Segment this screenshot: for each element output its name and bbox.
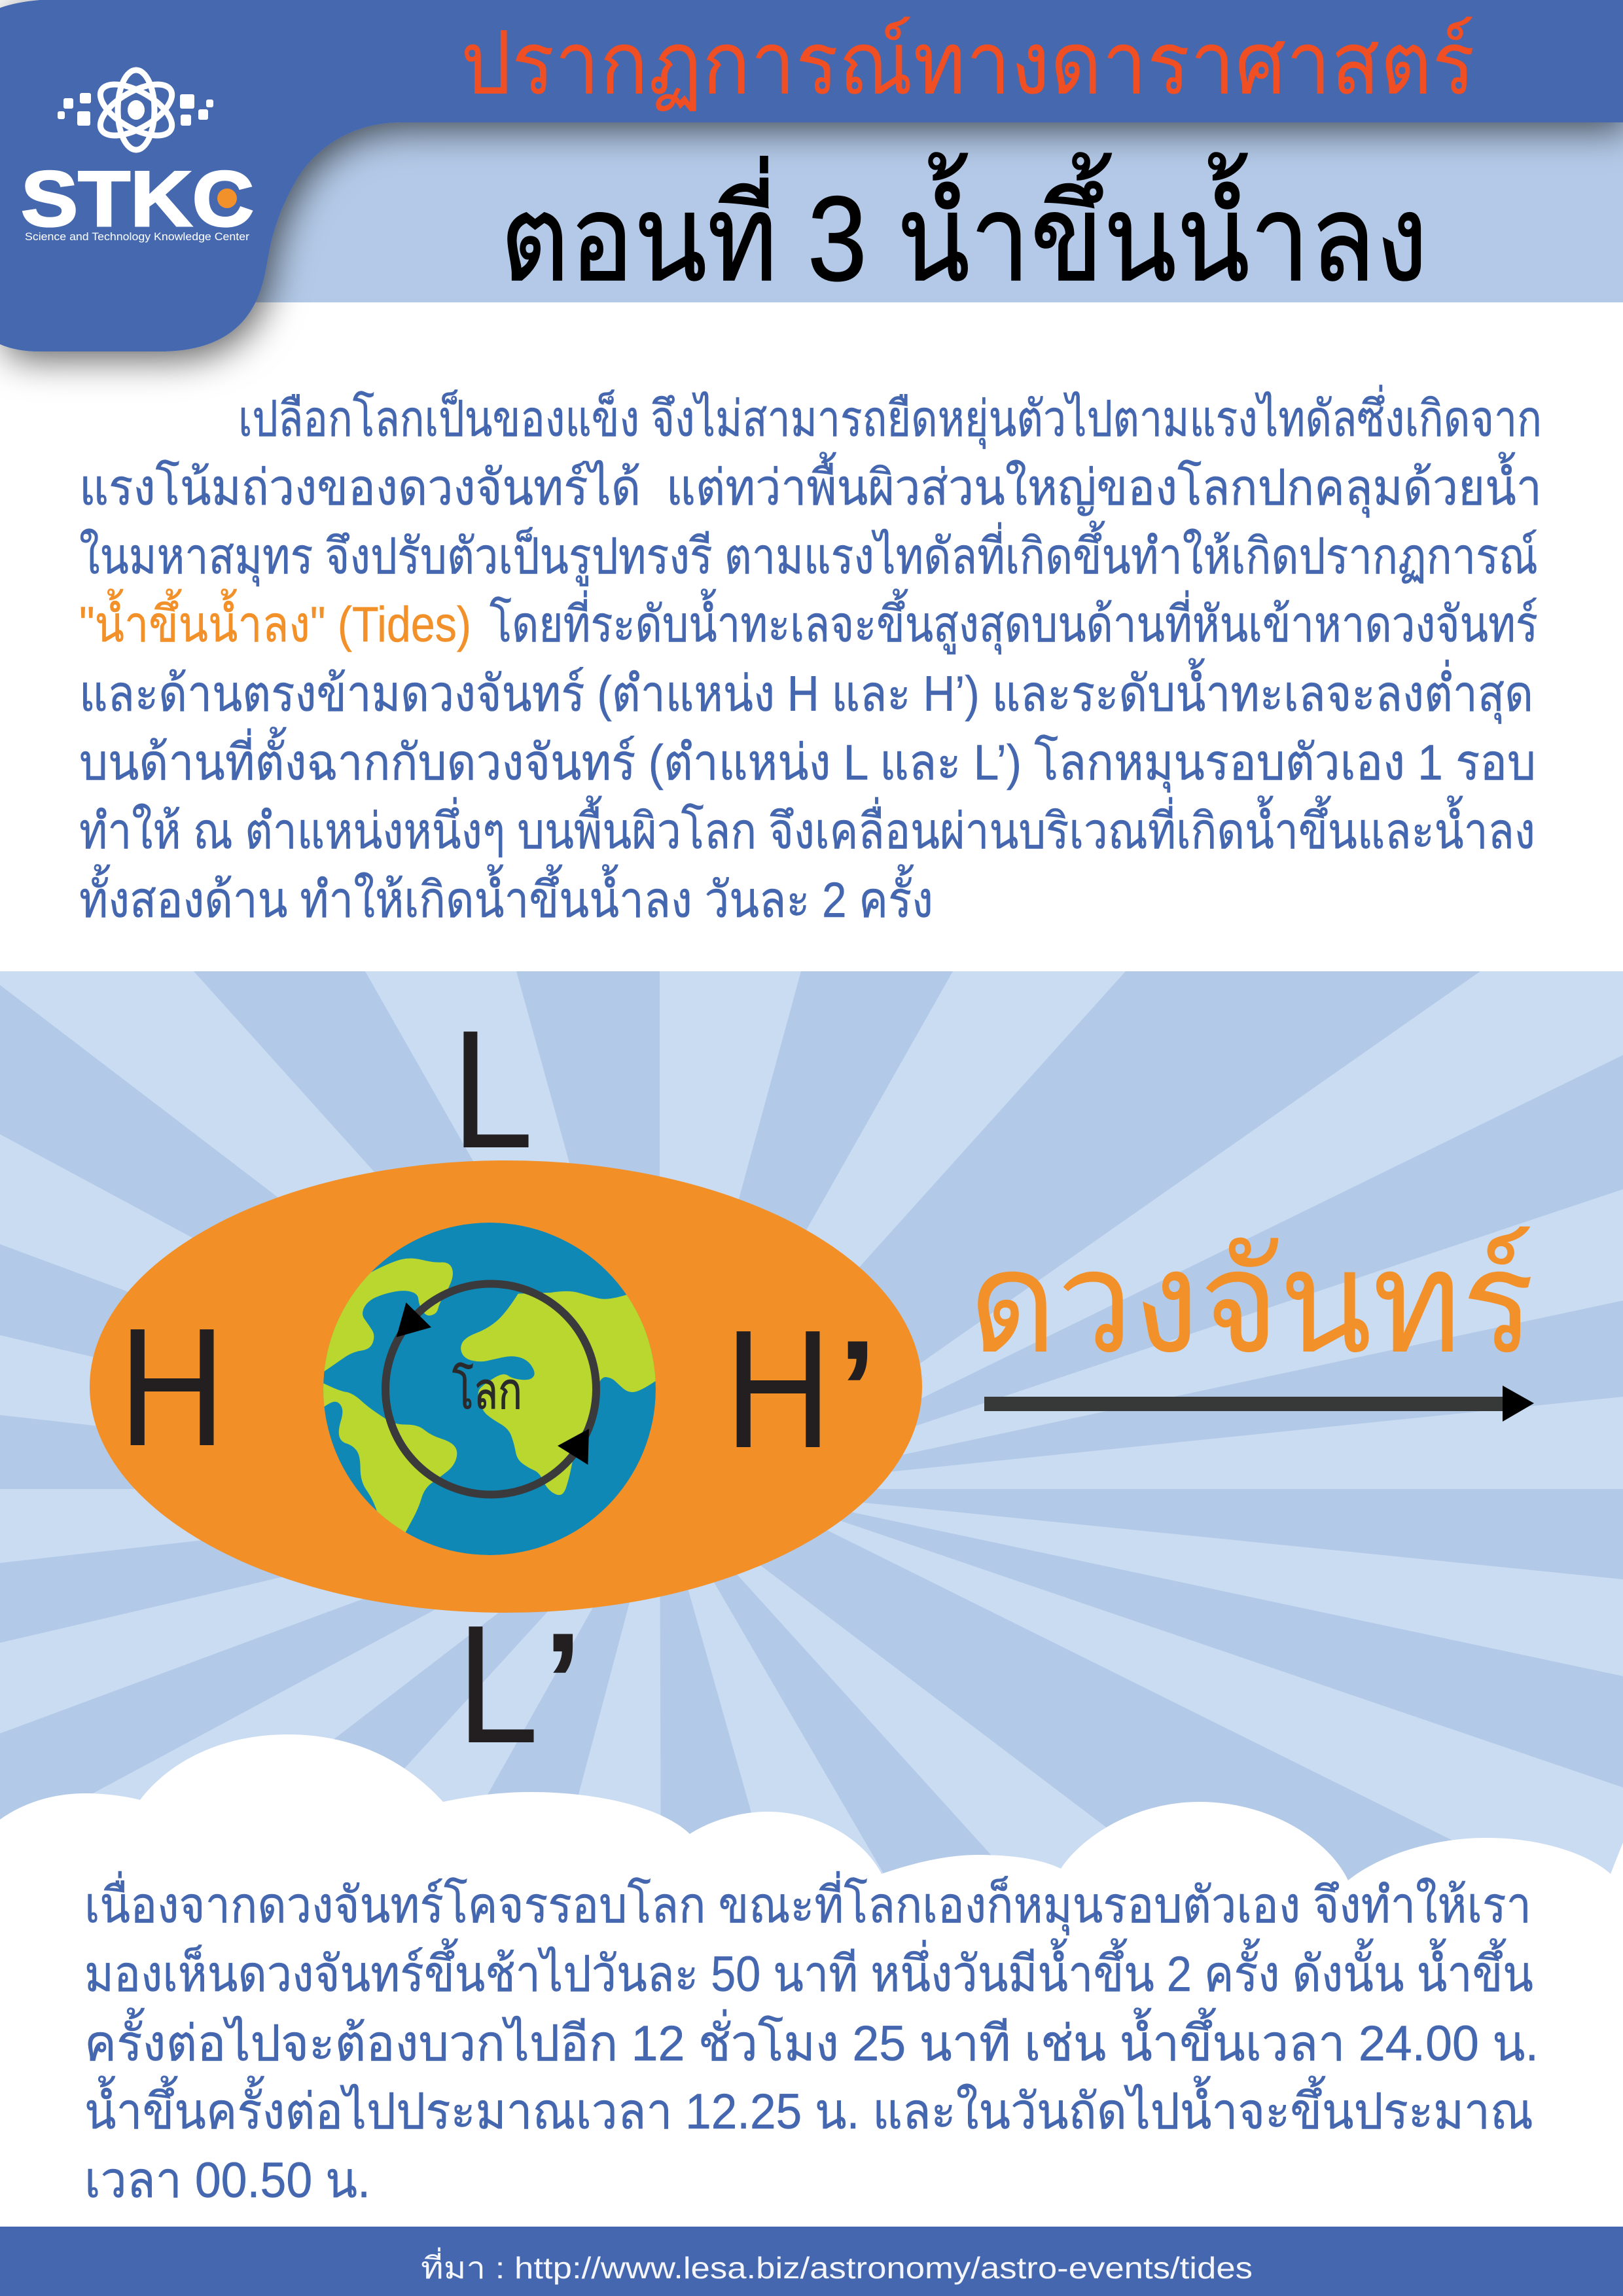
arrow toward moon [984, 1386, 1534, 1422]
footer source text: ที่มา : http://www.lesa.biz/astronomy/astro-events/tides [421, 2247, 1253, 2285]
text block: tides explanation: ทั้งสองด้าน ทำให้เกิดน้ำขึ้นน้ำลง วันละ 2 ครั้ง [79, 864, 933, 928]
title: ปรากฏการณ์ทางดาราศาสตร์ [461, 15, 1475, 113]
label: moon: ดวงจันทร์ [969, 1223, 1535, 1382]
subtitle: ตอนที่ 3 น้ำขึ้นน้ำลง [500, 152, 1428, 306]
logo: STKC [21, 70, 254, 243]
label: H prime: ’ [838, 1312, 876, 1465]
text block: moon delay explanation: เวลา 00.50 น. [84, 2153, 370, 2208]
icon: atom with pixels [58, 70, 213, 150]
logo wordmark: STKC [21, 155, 254, 243]
text block: moon delay explanation: น้ำขึ้นครั้งต่อไปประมาณเวลา 12.25 น. และในวันถัดไปน้ำจะขึ้นประมาณ [84, 2075, 1533, 2140]
text block: tides explanation: "น้ำขึ้นน้ำลง" (Tides) [79, 588, 471, 653]
rotation arrow ring [385, 1284, 596, 1495]
clouds [0, 1734, 1623, 1937]
icon: earth globe [314, 1223, 675, 1555]
text block: tides explanation [79, 385, 1542, 928]
header subtitle band [0, 98, 1623, 302]
footer bar [0, 2227, 1623, 2296]
text block: moon delay explanation: ครั้งต่อไปจะต้องบวกไปอีก 12 ชั่วโมง 25 นาที เช่น น้ำขึ้นเวลา 24.00 น. [84, 2007, 1539, 2072]
logo orange dot [217, 188, 237, 208]
tidal bulge: orange ellipse [90, 1160, 922, 1613]
label: L prime: ’ [544, 1604, 582, 1758]
panel: tide diagram sunburst background [0, 971, 1623, 1933]
logo tagline: Science and Technology Knowledge Center [25, 230, 249, 243]
label: earth: โลก [452, 1362, 522, 1420]
label: L: L [452, 996, 533, 1183]
text block: moon delay explanation [84, 1871, 1539, 2208]
label: L prime: L [457, 1590, 539, 1778]
label: H: H [118, 1293, 226, 1481]
header blue bar with logo blob [0, 0, 1623, 351]
label: H prime: H [724, 1295, 832, 1483]
